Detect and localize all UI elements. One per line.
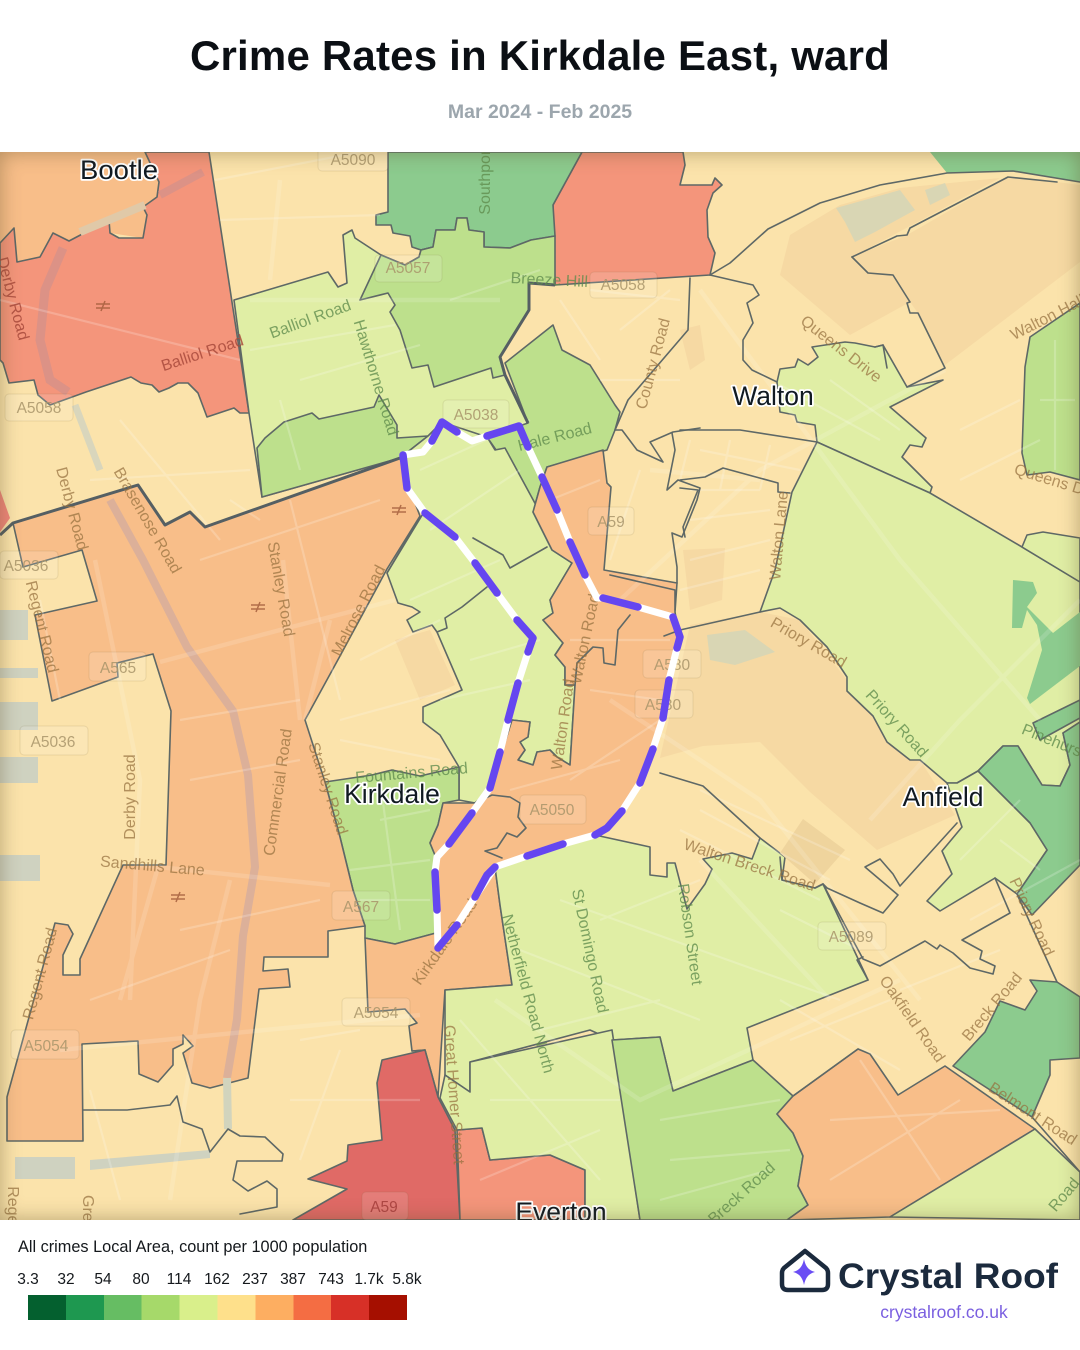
road shields: A5038 bbox=[454, 407, 498, 424]
road labels on green: Hale Road bbox=[516, 420, 594, 455]
road shields: A5054 bbox=[24, 1038, 69, 1055]
dark green: Stanley Park corner bbox=[1012, 580, 1080, 704]
light green: Walton centre bbox=[777, 342, 943, 493]
road shields: A5058 bbox=[601, 277, 645, 294]
red: top centre bbox=[553, 152, 722, 285]
road labels on cream and peach: Belmont Road bbox=[985, 1079, 1080, 1149]
road labels on cream and peach: Oakfield Road bbox=[876, 973, 948, 1066]
road shields: A5057 bbox=[386, 260, 430, 277]
red: Bootle bbox=[0, 152, 249, 417]
wordmark: Crystal Roof bbox=[838, 1256, 1058, 1296]
road shields: A59 bbox=[597, 514, 625, 531]
railway band bbox=[40, 172, 255, 1129]
road labels on cream and peach: Commercial Road bbox=[261, 728, 296, 857]
road labels on cream and peach: Regent Road bbox=[22, 579, 61, 675]
mid green: east top bbox=[1022, 303, 1080, 480]
road labels on cream and peach: Priory Road bbox=[1006, 875, 1057, 959]
place names bbox=[80, 155, 984, 1227]
road labels on green: Netherfield Road North bbox=[498, 913, 557, 1075]
legend values: 1.7k bbox=[354, 1271, 384, 1288]
road labels on green bbox=[267, 145, 1080, 1228]
road shields: A5089 bbox=[829, 929, 873, 946]
choropleth map bbox=[0, 152, 1080, 1220]
legend values: 387 bbox=[280, 1271, 306, 1288]
road labels on green: Balliol Road bbox=[267, 297, 353, 342]
road labels on green: Fountains Road bbox=[355, 760, 469, 787]
legend bbox=[17, 1238, 422, 1320]
boundary lines bbox=[83, 171, 1080, 1214]
road labels on cream and peach: Queens Drive bbox=[797, 313, 885, 386]
road shields bbox=[0, 147, 886, 1220]
road labels on green: Breeze Hill bbox=[510, 270, 588, 291]
dark green: Pinehurst strip bbox=[1033, 700, 1080, 740]
icon: house with sparkle bbox=[782, 1251, 828, 1290]
base land bbox=[0, 152, 1080, 1220]
road labels on cream and peach: Great Homer Street bbox=[440, 1024, 467, 1165]
road labels on green: St Domingo Road bbox=[568, 888, 611, 1015]
logo: Crystal Roof bbox=[780, 1248, 1058, 1322]
light green: St Domingo bbox=[445, 835, 868, 1092]
road labels on green: Hawthorne Road bbox=[350, 318, 401, 438]
legend values: 114 bbox=[167, 1271, 191, 1288]
website: crystalroof.co.uk bbox=[880, 1302, 1008, 1322]
road shields: A580 bbox=[645, 697, 681, 714]
road labels on cream and peach: Priory Road bbox=[767, 615, 849, 672]
dark green: east south bbox=[953, 980, 1080, 1117]
light green: Stanley Park bbox=[760, 442, 1080, 786]
road labels on green: Priory Road bbox=[862, 687, 931, 761]
title: Crime Rates in Kirkdale East, ward bbox=[190, 32, 890, 79]
road labels on cream and peach bbox=[4, 292, 1080, 1238]
road shields: A5036 bbox=[4, 558, 48, 575]
grey water and docks bbox=[707, 183, 950, 665]
road labels on cream and peach: Walton Lane bbox=[767, 490, 792, 581]
legend values: 32 bbox=[57, 1271, 75, 1288]
legend values: 743 bbox=[318, 1271, 344, 1288]
red-orange: Everton bbox=[457, 1128, 585, 1220]
legend values: 80 bbox=[132, 1271, 150, 1288]
red: Everton north bbox=[293, 1050, 460, 1220]
peach: western block bbox=[7, 458, 420, 1141]
light green: ward core bbox=[387, 422, 575, 803]
road shields: A565 bbox=[100, 660, 136, 677]
road shields: A5054 bbox=[354, 1005, 399, 1022]
legend values: 54 bbox=[94, 1271, 112, 1288]
road labels on cream and peach: Kirkdale Road bbox=[410, 896, 481, 988]
light green: bottom right bbox=[890, 1129, 1080, 1220]
heavy district boundary bbox=[0, 283, 555, 535]
place names: Anfield bbox=[902, 782, 984, 812]
dark green: top centre bbox=[376, 152, 582, 250]
road labels on cream and peach: Stanley Road bbox=[304, 740, 350, 837]
legend colour scale bbox=[28, 1295, 407, 1320]
road labels on cream and peach: Walton Road bbox=[568, 592, 603, 686]
dark green: Anfield east bbox=[978, 722, 1080, 915]
mid green: Breeze Hill bbox=[360, 218, 555, 387]
road labels on cream and peach: Derby Road bbox=[52, 465, 91, 552]
road labels on cream and peach: Walton Breck Road bbox=[681, 836, 817, 895]
subtitle: date range: Mar 2024 - Feb 2025 bbox=[448, 101, 632, 123]
mid green: Hale Road bbox=[487, 325, 620, 512]
map edge vignette bbox=[0, 152, 1080, 1220]
peach: south-east bbox=[777, 1049, 1035, 1220]
red corner fragment bbox=[0, 490, 10, 532]
road labels on cream and peach: County Road bbox=[633, 317, 674, 411]
legend values: 5.8k bbox=[392, 1271, 422, 1288]
road shields: A5036 bbox=[31, 734, 75, 751]
road labels on cream and peach: Brasenose Road bbox=[110, 465, 184, 577]
place names: Kirkdale bbox=[344, 779, 440, 809]
mid green: south of Balliol bbox=[257, 395, 428, 497]
light green: Netherfield south bbox=[440, 1030, 640, 1220]
place names: Walton bbox=[732, 381, 814, 411]
stadium bbox=[780, 819, 845, 884]
ward boundary: Kirkdale East bbox=[403, 422, 680, 948]
place names: Bootle bbox=[80, 155, 158, 185]
road shields: A59 bbox=[370, 1199, 398, 1216]
street network bbox=[0, 150, 1080, 1200]
legend title: All crimes Local Area, count per 1000 population bbox=[18, 1238, 367, 1256]
road labels on red: Balliol Road bbox=[159, 332, 246, 375]
tan parks bbox=[395, 177, 1080, 850]
road labels on cream and peach: Stanley Road bbox=[264, 540, 297, 638]
legend values: 162 bbox=[204, 1271, 230, 1288]
legend values: 237 bbox=[242, 1271, 268, 1288]
road labels on cream and peach: Walton Road bbox=[549, 678, 578, 771]
road shields: A5090 bbox=[331, 152, 376, 169]
mid green: south bbox=[612, 1037, 808, 1220]
road labels on cream and peach: Melrose Road bbox=[329, 563, 389, 659]
road shields: A567 bbox=[343, 899, 379, 916]
road labels on cream and peach: Sandhills Lane bbox=[99, 853, 206, 880]
road labels on green: Robson Street bbox=[674, 883, 705, 987]
mid green: Kirkdale bbox=[325, 767, 459, 944]
road labels on cream and peach: Derby Road bbox=[122, 754, 139, 840]
light green: Balliol bbox=[234, 230, 528, 497]
road labels on cream and peach: Regent Road bbox=[20, 926, 61, 1022]
station symbols bbox=[96, 301, 406, 902]
road labels on red bbox=[0, 255, 246, 375]
peach: Kirkdale south & Walton Road corridor bbox=[365, 450, 680, 1097]
dark green: top right bbox=[930, 152, 1080, 182]
legend values bbox=[17, 1271, 422, 1288]
legend values: 3.3 bbox=[17, 1271, 39, 1288]
road labels on cream and peach: Breck Road bbox=[959, 970, 1026, 1045]
road shields: A5058 bbox=[17, 400, 61, 417]
road shields: A580 bbox=[654, 657, 690, 674]
road shields: A5050 bbox=[530, 802, 575, 819]
red-orange: Bootle peach bbox=[0, 152, 159, 262]
light green: Anfield bbox=[927, 771, 1047, 911]
